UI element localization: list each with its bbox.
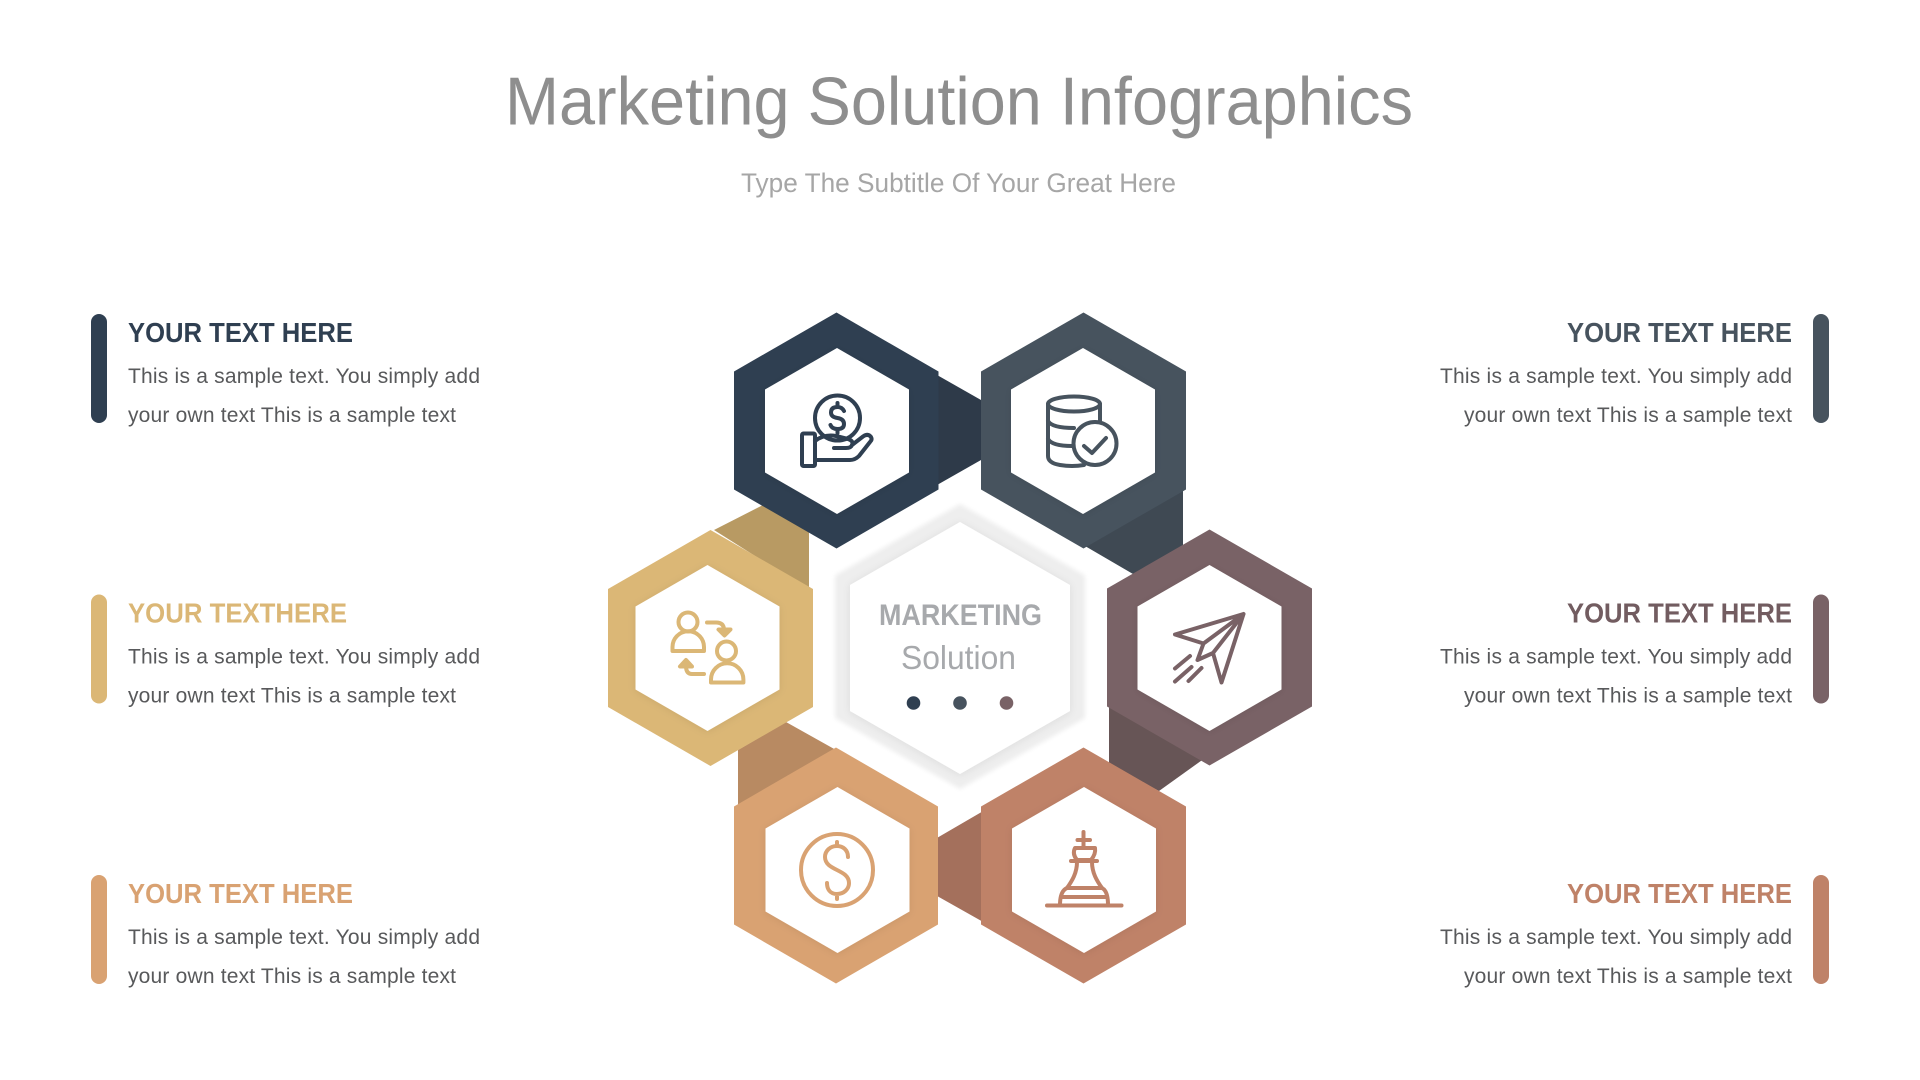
heading: YOUR TEXT HERE <box>1567 317 1792 348</box>
right block 3 <box>1440 875 1829 988</box>
connector: navy to slate <box>930 371 981 489</box>
left block 1 <box>91 314 480 427</box>
title: Marketing Solution Infographics <box>505 64 1413 140</box>
body text: This is a sample text. You simply add <box>128 365 480 388</box>
heading: YOUR TEXTHERE <box>128 598 347 628</box>
body text: This is a sample text. You simply add <box>1440 365 1792 388</box>
left block 3: your own text This is a sample text <box>128 965 456 988</box>
right block 3: your own text This is a sample text <box>1464 965 1792 988</box>
left block 2: your own text This is a sample text <box>128 684 456 708</box>
left block 2 <box>91 594 480 708</box>
accent bar <box>91 594 107 704</box>
left block 1: your own text This is a sample text <box>128 404 456 427</box>
hexagon 3: brown <box>1107 530 1312 766</box>
hexagon diagram <box>608 312 1312 984</box>
subtitle: Type The Subtitle Of Your Great Here <box>741 168 1176 198</box>
left block 3 <box>91 875 480 988</box>
body text: This is a sample text. You simply add <box>128 646 480 668</box>
accent bar <box>91 875 107 984</box>
hexagon 1: navy <box>734 312 938 548</box>
right block 1 <box>1440 314 1829 427</box>
center subheading: Solution <box>901 639 1016 676</box>
icon: database check <box>1048 396 1116 466</box>
accent bar <box>1813 875 1829 984</box>
center dots <box>907 696 1013 710</box>
icon: dollar coin <box>801 834 873 906</box>
hexagon 6: terracotta <box>981 748 1186 984</box>
hexagon 5: orange <box>734 748 938 984</box>
right block 1: your own text This is a sample text <box>1464 404 1792 427</box>
icon: chess king <box>1047 832 1122 906</box>
hexagon 2: slate <box>981 312 1186 548</box>
accent bar <box>1813 594 1829 704</box>
center hexagon <box>835 504 1085 789</box>
hexagon 4: gold <box>608 530 813 766</box>
connector: gold to navy <box>714 505 809 590</box>
heading: YOUR TEXT HERE <box>128 878 353 909</box>
accent bar <box>1813 314 1829 423</box>
icon: hand holding coin <box>802 396 872 466</box>
right block 2 <box>1440 594 1829 708</box>
right block 2: your own text This is a sample text <box>1464 684 1792 708</box>
connector: slate to brown <box>1085 485 1183 574</box>
connector: brown to terracotta <box>1109 700 1205 791</box>
center heading: MARKETING <box>879 599 1042 632</box>
heading: YOUR TEXT HERE <box>1567 598 1792 628</box>
connector: orange to gold <box>738 722 836 806</box>
heading: YOUR TEXT HERE <box>128 317 353 348</box>
accent bar <box>91 314 107 423</box>
body text: This is a sample text. You simply add <box>128 926 480 949</box>
connector: terracotta to orange <box>930 810 985 923</box>
icon: paper plane <box>1175 614 1244 682</box>
icon: people exchange <box>672 612 743 682</box>
body text: This is a sample text. You simply add <box>1440 926 1792 949</box>
body text: This is a sample text. You simply add <box>1440 646 1792 668</box>
heading: YOUR TEXT HERE <box>1567 878 1792 909</box>
